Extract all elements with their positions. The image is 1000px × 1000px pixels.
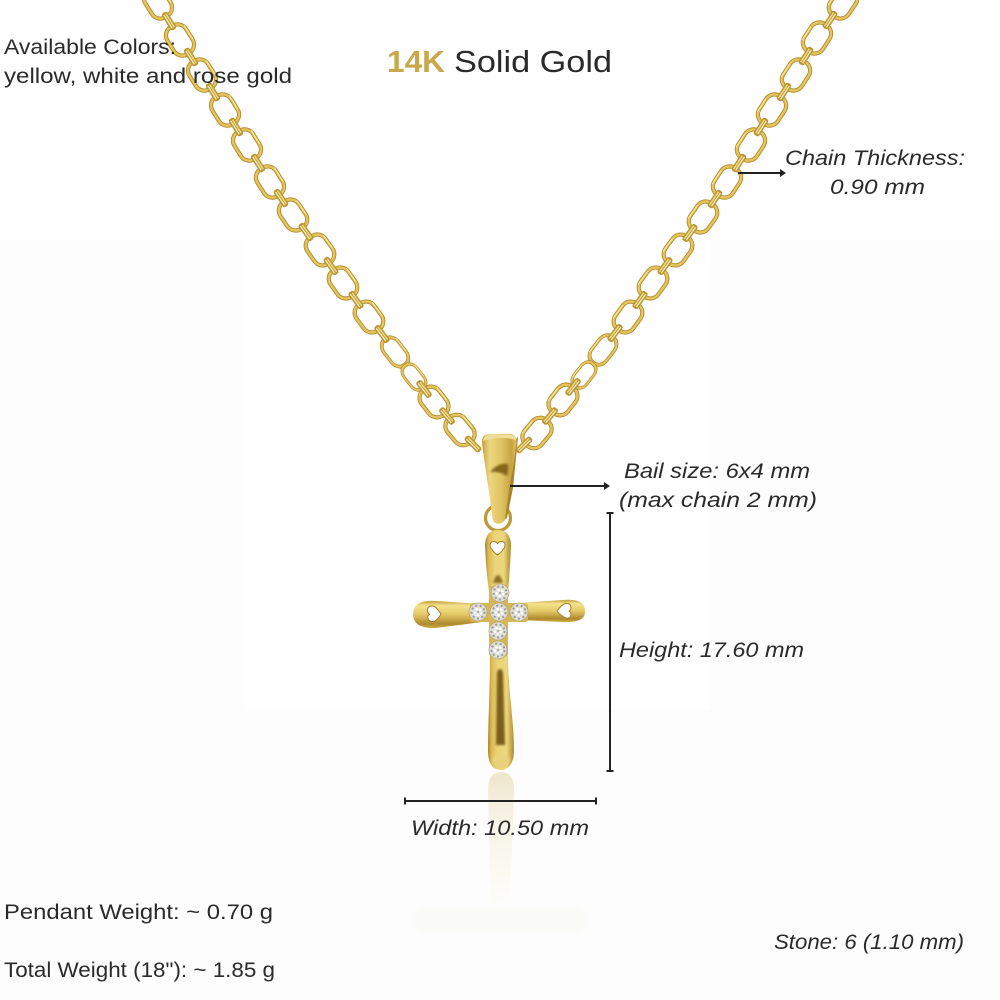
cross arms (413, 586, 585, 656)
available colors text: Available Colors: (4, 35, 176, 59)
pendant: cross with bail (413, 434, 585, 770)
title: 14K (387, 44, 446, 79)
cross vertical top (485, 530, 511, 592)
label: height: Height: 17.60 mm (619, 638, 804, 662)
jump ring (486, 506, 510, 530)
available colors text (4, 35, 292, 88)
arrow: chain thickness (738, 169, 786, 177)
title: Solid Gold (454, 44, 612, 79)
arrow: bail size (510, 482, 610, 490)
label: bail size: Bail size: 6x4 mm (624, 459, 810, 483)
label: chain thickness (785, 146, 965, 199)
bail (482, 434, 518, 524)
total weight: Total Weight (18"): ~ 1.85 g (4, 958, 275, 982)
label: bail size: (max chain 2 mm) (619, 488, 817, 512)
dimension line: width (405, 798, 596, 804)
pendant reflection (415, 772, 585, 932)
available colors text: yellow, white and rose gold (4, 64, 292, 88)
stones (469, 584, 528, 659)
stone info: Stone: 6 (1.10 mm) (774, 930, 964, 954)
left chain (140, 0, 482, 453)
lower stem (488, 656, 514, 770)
label: chain thickness: Chain Thickness: (785, 146, 965, 170)
title (387, 44, 612, 79)
label: bail size (619, 459, 817, 512)
dimension line: height (606, 513, 614, 771)
label: width: Width: 10.50 mm (411, 816, 589, 840)
right chain (515, 0, 861, 454)
pendant weight: Pendant Weight: ~ 0.70 g (4, 900, 273, 924)
label: chain thickness: 0.90 mm (830, 175, 925, 199)
